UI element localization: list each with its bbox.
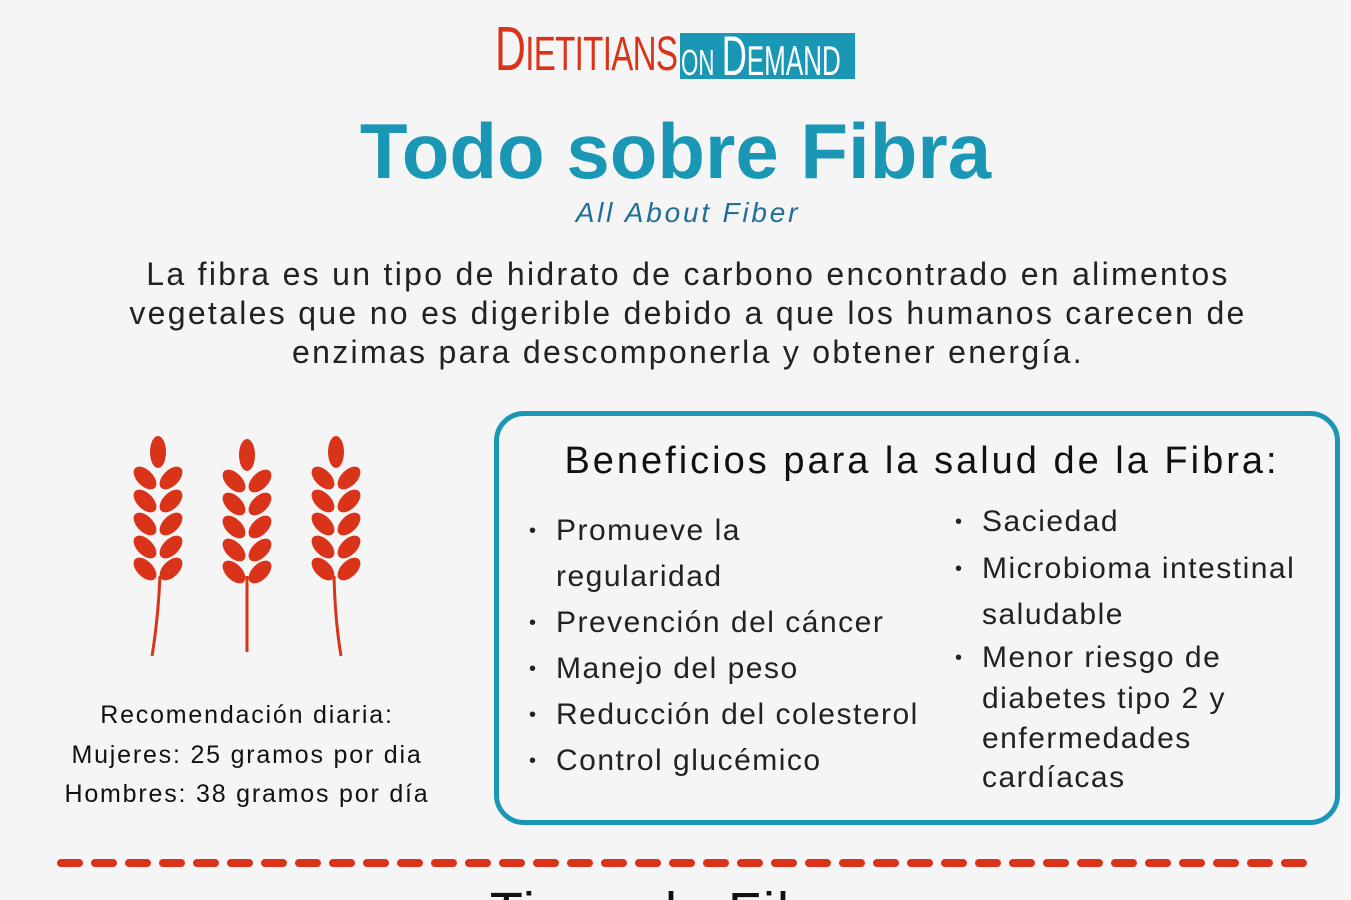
intro paragraph: enzimas para descomponerla y obtener energía. [292, 334, 1084, 370]
title: Todo sobre Fibra [360, 107, 991, 195]
right benefits list: enfermedades [982, 722, 1192, 754]
divider [57, 859, 1307, 867]
left benefits list: Promueve la [556, 514, 741, 547]
daily recommendation: Recomendación diaria: [100, 701, 394, 729]
left benefits list [530, 514, 919, 777]
right benefits list: cardíacas [982, 761, 1126, 794]
logo: ON DEMAND [681, 24, 841, 87]
left benefits list: regularidad [556, 560, 723, 593]
left benefits list: Manejo del peso [556, 652, 799, 685]
right benefits list: diabetes tipo 2 y [982, 682, 1226, 715]
right benefits list [956, 505, 1295, 794]
intro paragraph: vegetales que no es digerible debido a que los humanos carecen de [129, 295, 1247, 331]
right benefits list: Microbioma intestinal [982, 552, 1295, 585]
subtitle: All About Fiber [576, 197, 800, 228]
right benefits list: Menor riesgo de [982, 641, 1221, 674]
right benefits list: Saciedad [982, 505, 1119, 538]
benefits heading: Beneficios para la salud de la Fibra: [564, 440, 1280, 482]
left benefits list: Prevención del cáncer [556, 606, 884, 639]
daily recommendation: Hombres: 38 gramos por día [64, 780, 430, 808]
icon: wheat stalks [134, 436, 360, 656]
left benefits list: Control glucémico [556, 744, 822, 777]
daily recommendation [64, 701, 430, 808]
left benefits list: Reducción del colesterol [556, 698, 919, 731]
intro paragraph: La fibra es un tipo de hidrato de carbono encontrado en alimentos [146, 256, 1230, 292]
intro paragraph [129, 256, 1247, 370]
daily recommendation: Mujeres: 25 gramos por dia [71, 740, 423, 768]
logo [495, 15, 855, 87]
panel: benefits [494, 411, 1340, 825]
right benefits list: saludable [982, 598, 1124, 631]
logo: DIETITIANS [495, 15, 677, 84]
